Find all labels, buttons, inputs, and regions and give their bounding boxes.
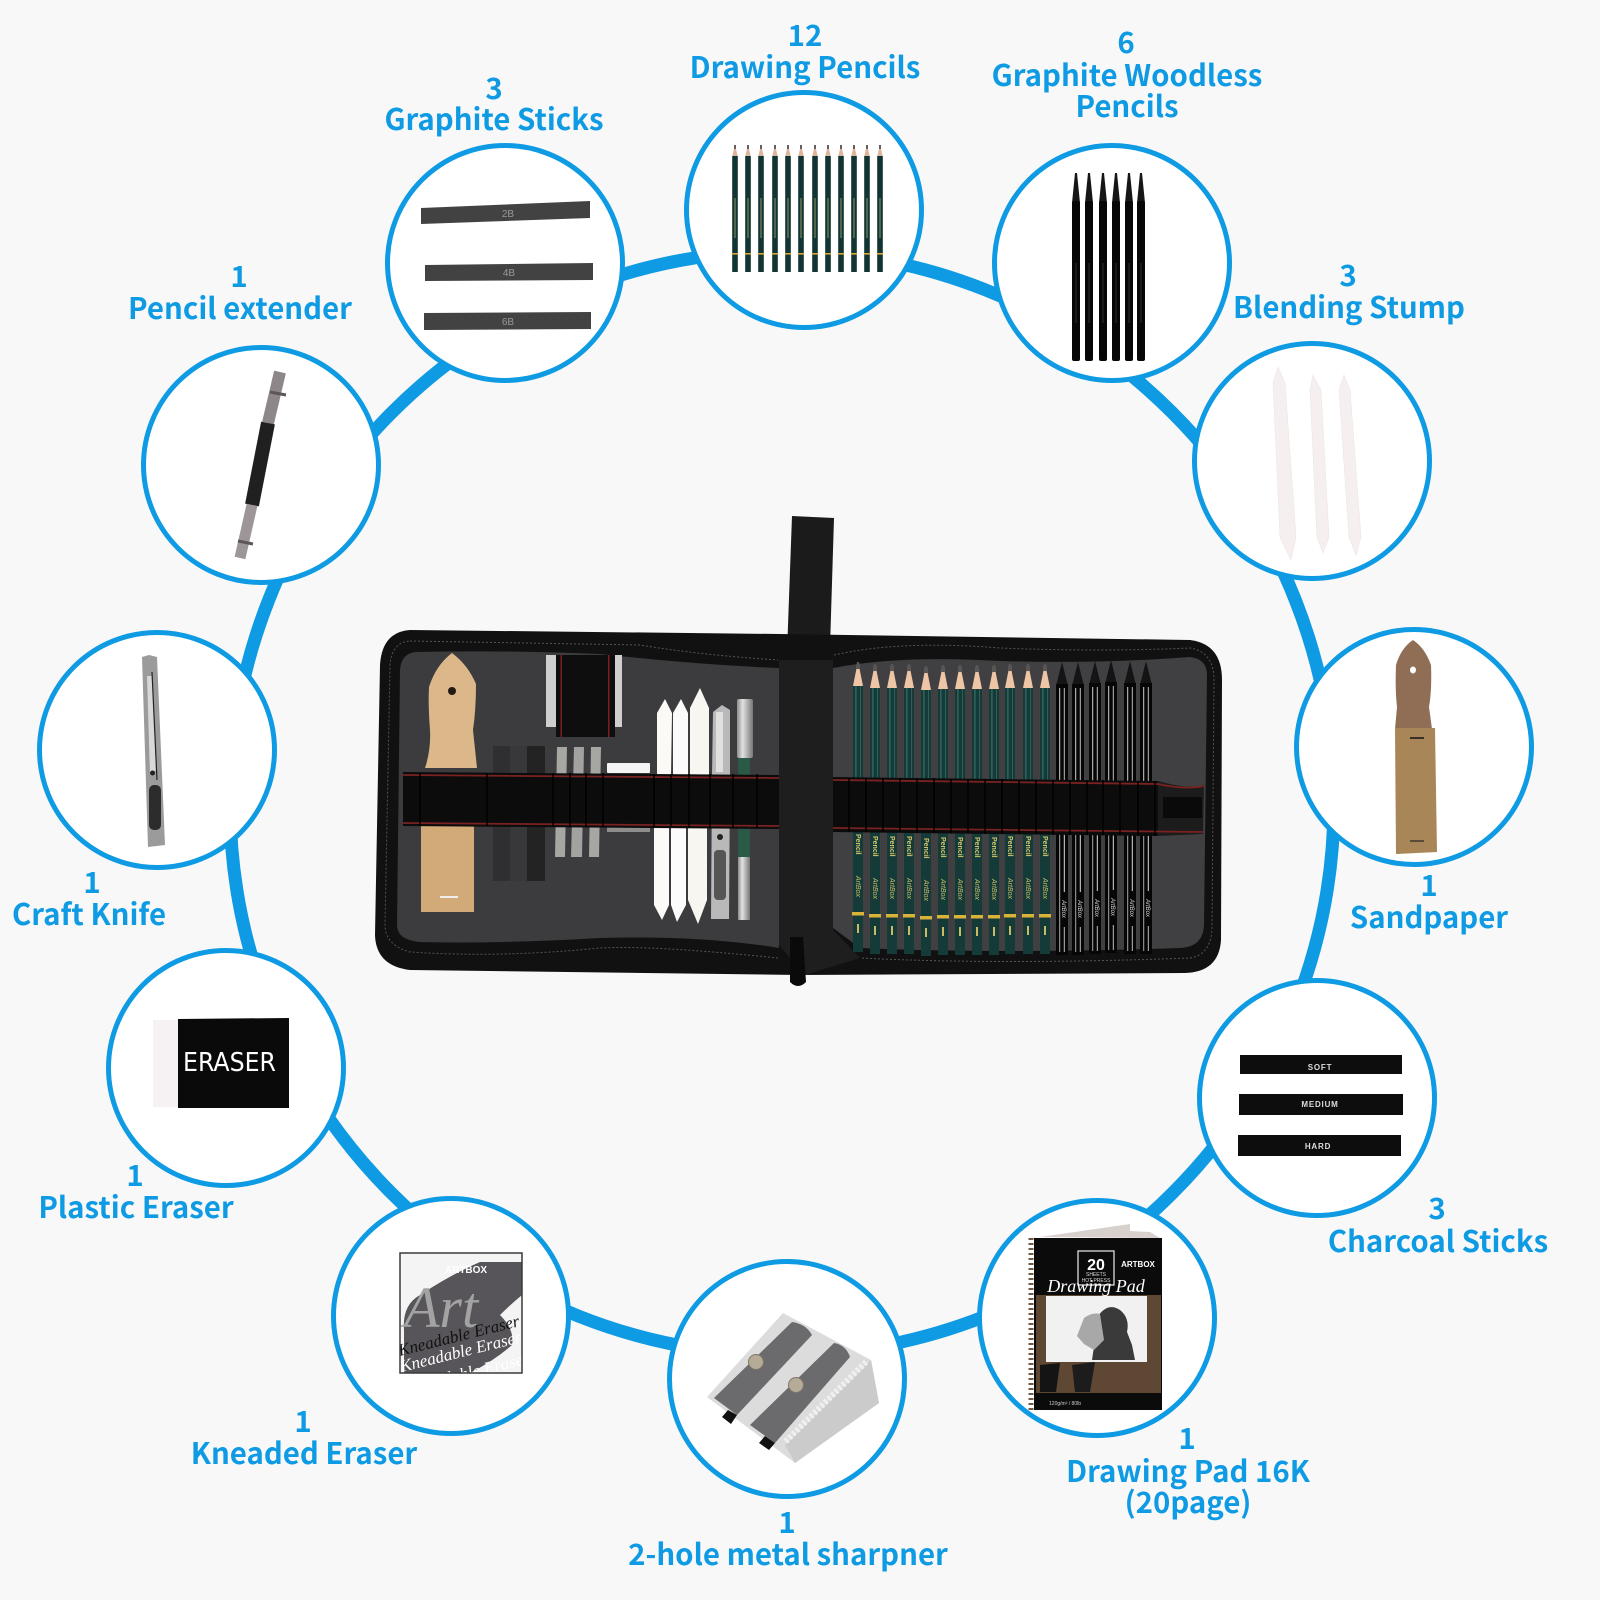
pencil extender: [737, 699, 753, 920]
sticks: 6B: [502, 317, 514, 328]
sandpaper pad: [421, 653, 477, 912]
item: 1 drawing pad: [980, 1200, 1311, 1522]
sticks: [1238, 1055, 1403, 1156]
item: 6 graphite woodless pencils: [992, 20, 1262, 380]
pad: SHEETS: [1086, 1272, 1107, 1278]
sharpener: [707, 1313, 879, 1463]
circle: [686, 92, 922, 328]
pad: HOT PRESS: [1082, 1278, 1111, 1284]
label: Graphite Woodless: [992, 53, 1262, 95]
pad: 20: [1087, 1257, 1105, 1274]
extender: [238, 372, 286, 558]
eraser box: ARTBOX: [445, 1265, 487, 1276]
label: 3: [1428, 1186, 1446, 1228]
label: Plastic Eraser: [38, 1185, 234, 1227]
zipper pull: [790, 937, 806, 986]
label: 1: [1178, 1416, 1196, 1458]
label: Graphite Sticks: [384, 97, 604, 139]
label: 12: [788, 13, 822, 55]
label: Pencil extender: [128, 286, 352, 328]
centre spine: [779, 660, 860, 975]
sticks: [421, 201, 593, 330]
pad: Drawing Pad: [1046, 1276, 1146, 1296]
case body: [375, 630, 1222, 975]
circle: [388, 146, 622, 380]
item: 1 2-hole metal sharpener: [628, 1262, 948, 1574]
circle: [980, 1200, 1214, 1436]
eraser box: [399, 1252, 523, 1374]
item: 3 blending stump: [1194, 253, 1465, 578]
circle: [40, 632, 274, 868]
label: 1: [1420, 863, 1438, 905]
label: Blending Stump: [1233, 285, 1465, 327]
case strap: [786, 516, 834, 680]
case lining: [397, 651, 779, 948]
connecting ring: [230, 251, 1334, 1355]
sticks: MEDIUM: [1301, 1100, 1339, 1109]
label: 6: [1117, 20, 1135, 62]
elastic wrap: [546, 655, 622, 737]
item: 3 charcoal sticks: [1200, 980, 1548, 1261]
label: Drawing Pad 16K: [1066, 1449, 1311, 1491]
graphite sticks: [555, 747, 601, 857]
pencils: [732, 145, 883, 272]
zipper stitching: [385, 641, 1214, 962]
label: Sandpaper: [1350, 895, 1508, 937]
sticks: HARD: [1305, 1142, 1331, 1151]
stumps: [1273, 367, 1361, 560]
craft knife: [711, 705, 730, 919]
eraser: [153, 1018, 289, 1108]
label: 1: [126, 1153, 144, 1195]
charcoal sticks: [493, 746, 545, 881]
label: Charcoal Sticks: [1328, 1219, 1548, 1261]
label: 1: [294, 1399, 312, 1441]
label: 1: [83, 860, 101, 902]
eraser: ERASER: [183, 1048, 276, 1078]
label: 3: [1339, 253, 1357, 295]
sticks: SOFT: [1308, 1063, 1332, 1072]
label: Pencils: [1075, 84, 1179, 126]
sticks: 4B: [503, 268, 515, 279]
eraser: [607, 763, 650, 832]
label: 1: [230, 254, 248, 296]
eraser box: Kneadable Eraser: [397, 1327, 524, 1376]
label: Kneaded Eraser: [191, 1431, 417, 1473]
pad: ARTBOX: [1121, 1260, 1156, 1269]
knife: [142, 655, 165, 847]
drawing pencils: [852, 662, 1051, 956]
item: 1 craft knife: [12, 632, 274, 934]
circle: [1296, 630, 1532, 864]
label: Craft Knife: [12, 892, 166, 934]
pad: 120g/m² / 80lb: [1049, 1401, 1081, 1407]
label: 1: [778, 1500, 796, 1542]
circle: [334, 1198, 568, 1434]
eraser box: Kneadable Eraser: [405, 1348, 532, 1397]
pencils: [1072, 173, 1145, 361]
circle: [670, 1262, 904, 1496]
circle: [1200, 980, 1434, 1216]
circle: [144, 348, 378, 582]
item: 1 pencil extender: [128, 254, 378, 582]
blending stumps: [654, 688, 709, 924]
circle: [994, 146, 1230, 380]
circle: [108, 950, 344, 1186]
sandpaper: [1395, 640, 1437, 854]
label: Drawing Pencils: [690, 45, 920, 87]
woodless pencils: [1056, 660, 1152, 955]
eraser box: Kneadable Eraser: [395, 1311, 522, 1360]
elastic band: [403, 772, 1204, 836]
item: 12 drawing pencils: [686, 13, 922, 328]
label: 2-hole metal sharpner: [628, 1532, 948, 1574]
label: (20page): [1125, 1480, 1251, 1522]
item: 1 kneaded eraser: [191, 1198, 568, 1473]
item: 1 sandpaper: [1296, 630, 1532, 937]
circle: [1194, 344, 1430, 578]
pad: [1031, 1224, 1162, 1410]
sticks: 2B: [502, 209, 514, 220]
label: 3: [485, 66, 503, 108]
item: 1 plastic eraser: [38, 950, 344, 1227]
central pencil case: [375, 516, 1222, 986]
item: 3 graphite sticks: [384, 66, 622, 380]
eraser box: Art: [400, 1275, 480, 1340]
